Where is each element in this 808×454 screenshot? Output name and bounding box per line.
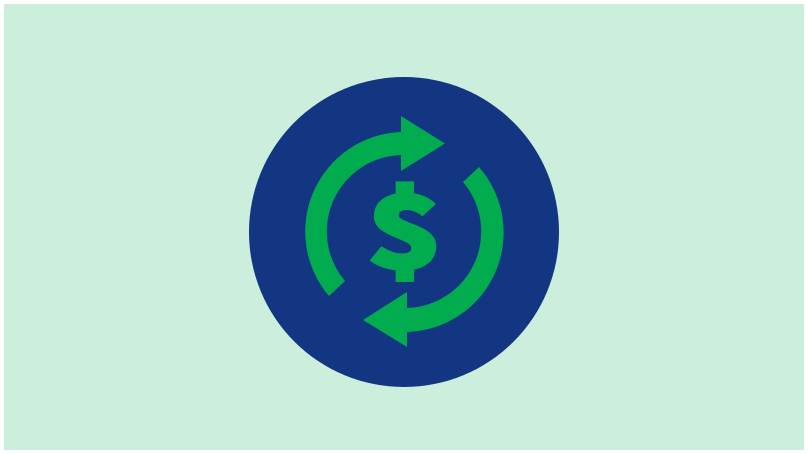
icon: dollar sign: $	[367, 152, 443, 297]
arrow: lower right circular arrow pointing left	[363, 167, 504, 347]
icon: navy circle	[249, 77, 559, 387]
arrow: upper left circular arrow pointing right	[305, 116, 445, 296]
